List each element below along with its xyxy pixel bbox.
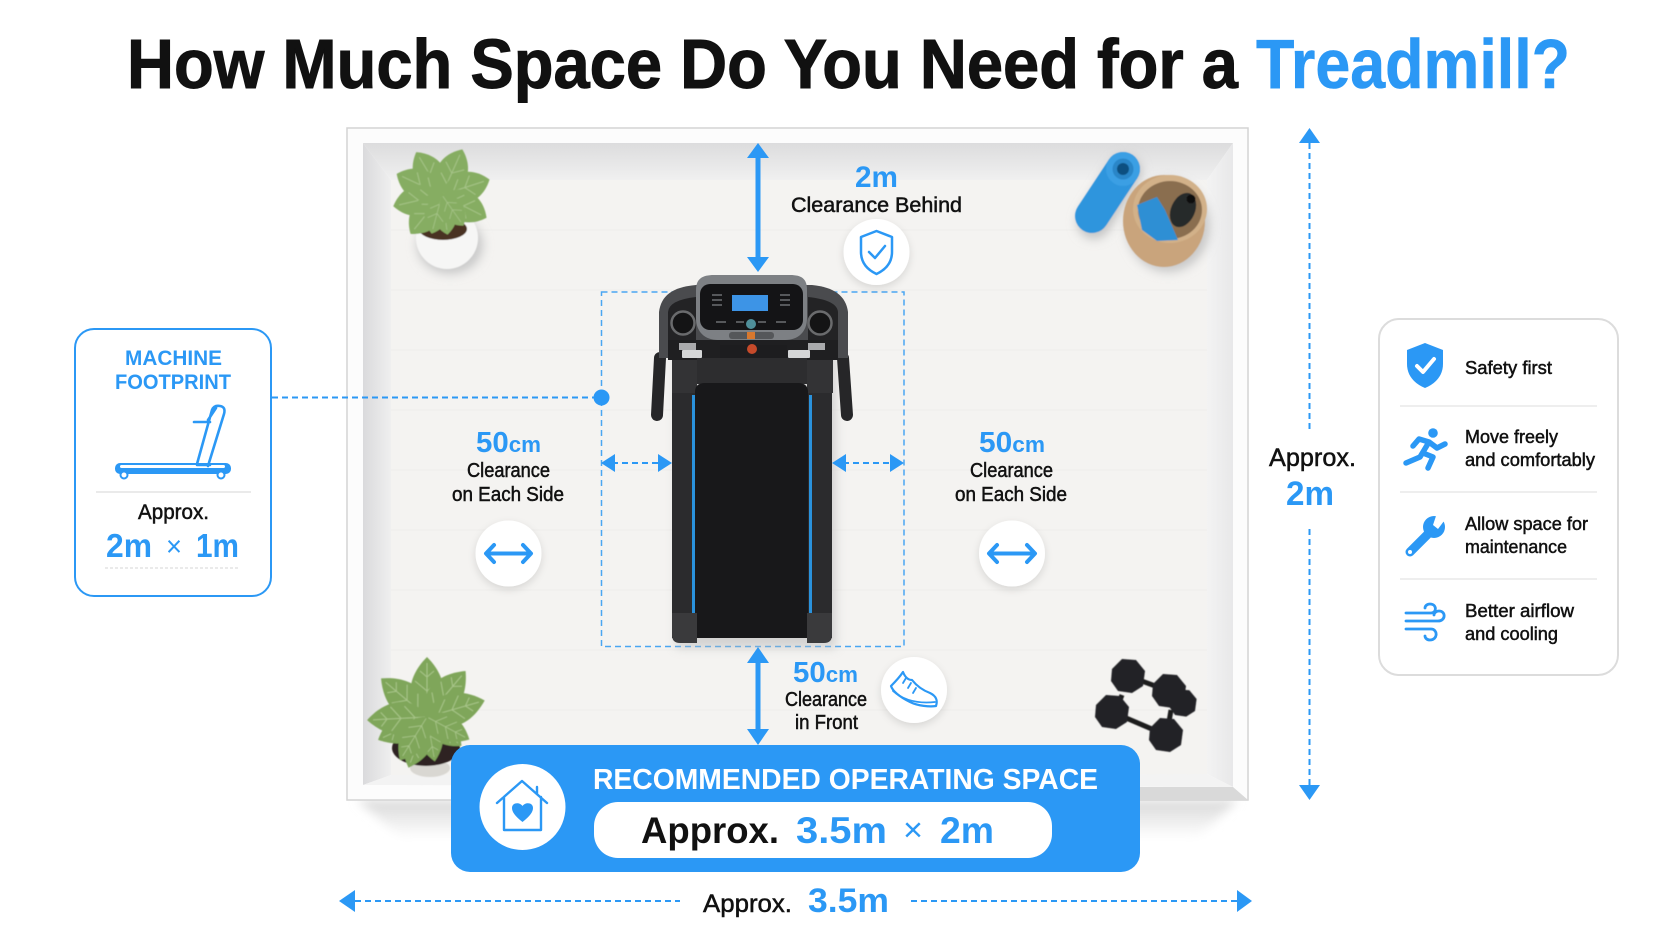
icon: shield badge [844, 219, 910, 285]
footprint size [106, 501, 239, 564]
size pill: Approx. [641, 810, 779, 851]
heading: RECOMMENDED OPERATING SPACE [593, 764, 1098, 796]
leader line from machine footprint [272, 390, 610, 406]
footprint size: × [166, 531, 182, 563]
panel: machine footprint [75, 329, 271, 596]
footprint heading: FOOTPRINT [115, 371, 231, 394]
icon: runner [1406, 428, 1445, 468]
panel: benefits [1379, 319, 1618, 675]
panel: recommended operating space [451, 745, 1140, 872]
footprint heading [115, 347, 231, 394]
benefit text: move: and comfortably [1465, 449, 1596, 470]
label: 2m clearance behind [791, 161, 962, 217]
benefit text: move: Move freely [1465, 426, 1559, 447]
label: left side clearance [452, 427, 564, 506]
arrow: room width 3.5m: Approx. [703, 890, 792, 918]
arch recesses [668, 297, 838, 358]
footprint heading: MACHINE [125, 347, 222, 370]
benefit text: maintenance: maintenance [1465, 536, 1567, 557]
benefit text: maintenance: Allow space for [1465, 513, 1588, 534]
treadmill belt [695, 383, 808, 638]
panel: room floor plan [347, 128, 1248, 838]
console arch [659, 285, 848, 358]
treadmill footprint dashed outline [602, 292, 904, 646]
label: 50cm clearance in front: Clearance [785, 689, 867, 711]
arrow: left side clearance [601, 454, 672, 472]
arrow: right side clearance [832, 454, 904, 472]
icon: house with heart [480, 764, 566, 850]
arrow: front clearance [747, 647, 769, 745]
label: 2m clearance behind: 2m [855, 161, 898, 194]
icon: shoe badge [881, 657, 947, 723]
benefit text: airflow: Better airflow [1465, 600, 1575, 621]
display pod [696, 275, 807, 340]
title: Treadmill? [1256, 25, 1570, 103]
label: 50cm clearance in front: in Front [795, 712, 858, 734]
icon: treadmill side view [115, 406, 231, 478]
neck [697, 358, 807, 384]
label: left side clearance: 50cm [476, 427, 541, 459]
console screen [732, 295, 768, 311]
treadmill [657, 275, 848, 648]
end caps [672, 613, 832, 643]
footprint size: 1m [196, 527, 239, 564]
label: right side clearance [955, 427, 1067, 506]
icon: wrench [1408, 516, 1447, 554]
label: 50cm clearance in front [785, 657, 867, 734]
label: 50cm clearance in front: 50cm [793, 657, 858, 689]
label: left side clearance: Clearance [467, 460, 550, 482]
silver grips [682, 350, 810, 358]
icon: wind [1406, 604, 1444, 640]
cup holders [672, 312, 832, 334]
label: right side clearance: 50cm [979, 427, 1045, 459]
arrow: clearance behind [747, 143, 769, 272]
benefit text: move [1465, 426, 1596, 470]
arrow: room width 3.5m [339, 882, 1252, 920]
benefit text: airflow: and cooling [1465, 623, 1558, 644]
handle bars [657, 358, 847, 415]
yoga mat [1092, 152, 1140, 222]
footprint size: Approx. [138, 501, 209, 524]
arrow: room depth 2m [1269, 128, 1356, 800]
basket with towel and bottle [1123, 175, 1210, 272]
label: 2m clearance behind: Clearance Behind [791, 194, 962, 217]
plant: top left [390, 143, 494, 274]
label: right side clearance: Clearance [970, 460, 1053, 482]
side rails [672, 393, 832, 638]
belt blue strips [692, 395, 812, 613]
label: left side clearance: on Each Side [452, 484, 564, 506]
footprint size: 2m [106, 527, 152, 564]
icon: right double arrow badge [979, 520, 1045, 586]
arrow: room depth 2m: Approx. [1269, 444, 1356, 472]
icon: safety shield [1407, 343, 1443, 388]
benefit text: safety: Safety first [1465, 357, 1552, 378]
size pill: 2m [940, 810, 994, 851]
frame blocks [672, 360, 833, 393]
benefit text: airflow [1465, 600, 1575, 644]
plant: bottom left [366, 657, 489, 777]
dumbbells [1095, 659, 1197, 752]
icon: left double arrow badge [476, 520, 542, 586]
arrow: room width 3.5m: 3.5m [808, 882, 889, 920]
size pill [594, 802, 1052, 858]
benefit text: maintenance [1465, 513, 1588, 557]
grip pads [679, 343, 825, 350]
arrow: room depth 2m: 2m [1286, 475, 1334, 513]
size pill: 3.5m [796, 810, 887, 851]
title: How Much Space Do You Need for a [127, 25, 1239, 103]
under-console band [668, 340, 838, 360]
size pill: × [903, 811, 923, 848]
label: right side clearance: on Each Side [955, 484, 1067, 506]
